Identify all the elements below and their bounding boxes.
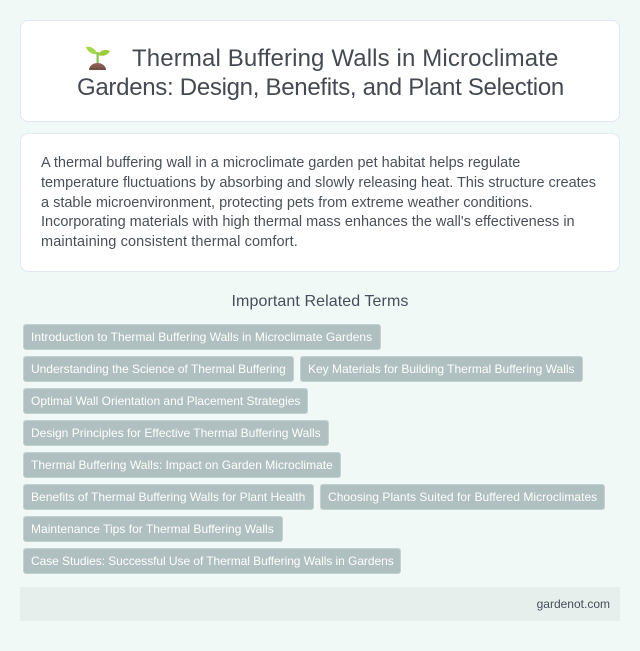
panel: title card — [20, 20, 620, 122]
description text — [41, 155, 596, 250]
tag 5: Design Principles for Effective Thermal Buffering Walls — [31, 426, 321, 440]
tag 5 — [23, 420, 329, 446]
tag 2 — [23, 356, 294, 382]
title line 1: Thermal Buffering Walls in Microclimate — [132, 45, 559, 72]
panel: description card — [20, 133, 620, 272]
footer bar — [20, 587, 620, 621]
tag 3: Key Materials for Building Thermal Buffering Walls — [308, 362, 575, 376]
tag 7: Benefits of Thermal Buffering Walls for Plant Health — [31, 490, 305, 504]
description text: A thermal buffering wall in a microclimate garden pet habitat helps regulate — [41, 155, 520, 171]
description text: Incorporating materials with high thermal mass enhances the wall's effectiveness in — [41, 214, 575, 230]
tag 8 — [320, 484, 605, 510]
tag 3 — [300, 356, 583, 382]
tag 10 — [23, 548, 401, 574]
tag 1 — [23, 324, 381, 350]
description text: temperature fluctuations by absorbing and slowly releasing heat. This structure creates — [41, 175, 596, 191]
heading: important related terms: Important Related Terms — [232, 293, 408, 310]
tag 10: Case Studies: Successful Use of Thermal Buffering Walls in Gardens — [31, 554, 394, 568]
description text: maintaining consistent thermal comfort. — [41, 234, 298, 250]
tag 8: Choosing Plants Suited for Buffered Microclimates — [328, 490, 597, 504]
tag 9: Maintenance Tips for Thermal Buffering Walls — [31, 522, 274, 536]
tag 4 — [23, 388, 308, 414]
tag 1: Introduction to Thermal Buffering Walls in Microclimate Gardens — [31, 330, 372, 344]
tag 9 — [23, 516, 283, 542]
footer source text: gardenot.com — [537, 597, 610, 611]
tag 6: Thermal Buffering Walls: Impact on Garden Microclimate — [31, 458, 333, 472]
tag 2: Understanding the Science of Thermal Buffering — [31, 362, 286, 376]
tag 6 — [23, 452, 341, 478]
tag 4: Optimal Wall Orientation and Placement Strategies — [31, 394, 300, 408]
tag 7 — [23, 484, 314, 510]
icon: seedling — [86, 46, 110, 70]
title line 2: Gardens: Design, Benefits, and Plant Selection — [77, 74, 564, 101]
description text: a stable microenvironment, protecting pets from extreme weather conditions. — [41, 195, 533, 211]
